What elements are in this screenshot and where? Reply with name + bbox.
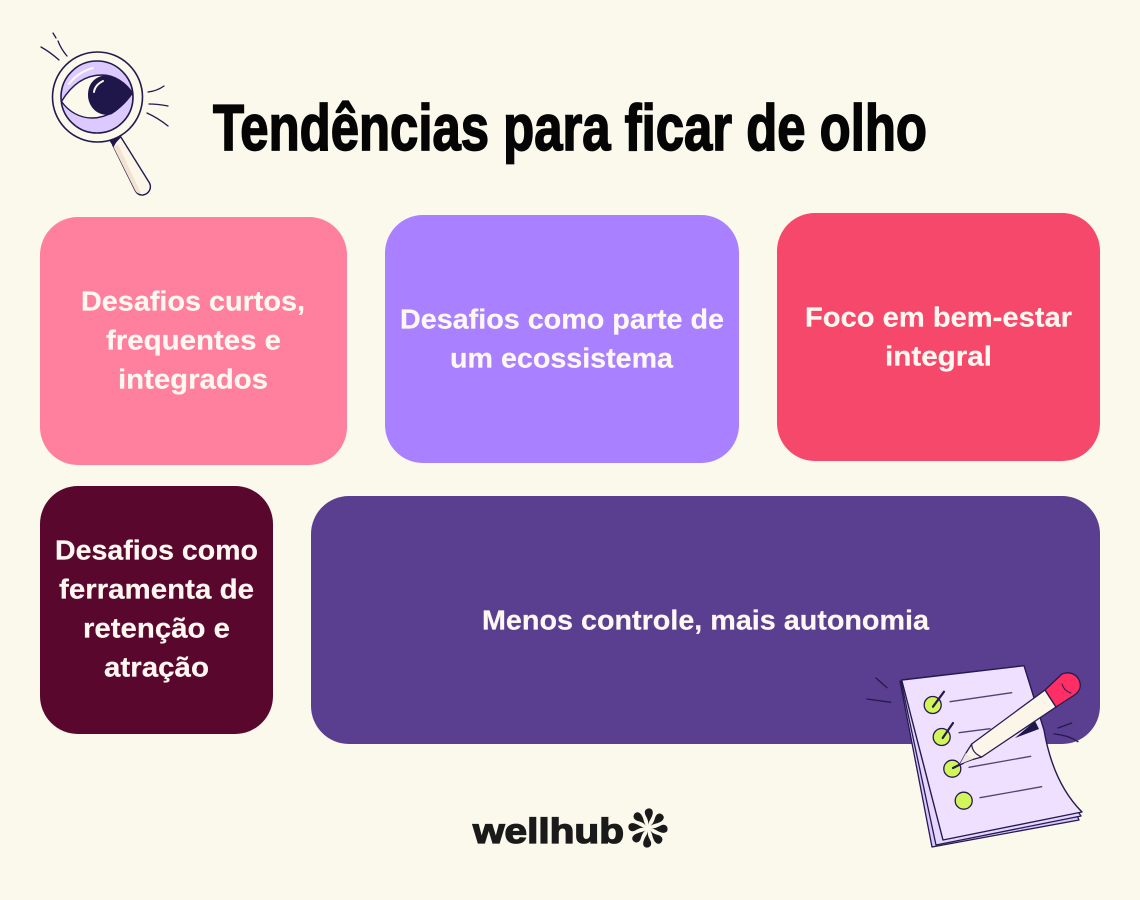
text: retenção e atração bbox=[55, 534, 258, 682]
panel: autonomia bbox=[311, 496, 1100, 744]
icon: check marks bbox=[933, 692, 963, 768]
text: retenção e atração: retenção e bbox=[83, 612, 230, 644]
text: retenção e atração: ferramenta de bbox=[59, 574, 254, 604]
icon: magnifier handle bbox=[109, 136, 150, 195]
panel: desafios curtos bbox=[40, 217, 347, 465]
text: retenção e atração: Desafios como bbox=[55, 534, 258, 566]
logo wordmark: wellhub bbox=[472, 812, 624, 851]
logo: wellhub bbox=[472, 808, 668, 851]
text: bem-estar bbox=[805, 302, 1072, 372]
icon: pencil bbox=[960, 673, 1080, 764]
icon: top sheet bbox=[902, 666, 1082, 840]
logo swirl mark bbox=[628, 808, 668, 848]
icon: lens bbox=[52, 52, 142, 142]
text: ecossistema bbox=[400, 304, 724, 374]
text: bem-estar: integral bbox=[885, 340, 992, 372]
icon: back sheets bbox=[900, 681, 1081, 847]
icon: sparkle lines bbox=[41, 33, 168, 126]
text: desafios curtos bbox=[81, 286, 305, 394]
icon: checklist with pencil bbox=[867, 666, 1082, 847]
icon: magnifying glass with eye bbox=[41, 33, 168, 195]
icon: check circles bbox=[924, 696, 972, 809]
panel: retenção e atração bbox=[40, 486, 273, 734]
text: autonomia: Menos controle, mais autonomia bbox=[482, 604, 930, 636]
text: ecossistema: um ecossistema bbox=[450, 342, 674, 374]
text: retenção e atração: atração bbox=[104, 652, 209, 682]
text: bem-estar: Foco em bem-estar bbox=[805, 302, 1072, 332]
text: desafios curtos: frequentes e bbox=[106, 324, 281, 356]
text: ecossistema: Desafios como parte de bbox=[400, 304, 724, 334]
panel: bem-estar bbox=[777, 213, 1100, 461]
icon: sparkle lines bbox=[867, 678, 1078, 742]
title: Tendências para ficar de olho bbox=[213, 91, 927, 164]
text: desafios curtos: Desafios curtos, bbox=[81, 286, 305, 316]
text: desafios curtos: integrados bbox=[118, 364, 268, 394]
panel: ecossistema bbox=[385, 215, 739, 463]
icon: checklist lines bbox=[950, 693, 1042, 798]
